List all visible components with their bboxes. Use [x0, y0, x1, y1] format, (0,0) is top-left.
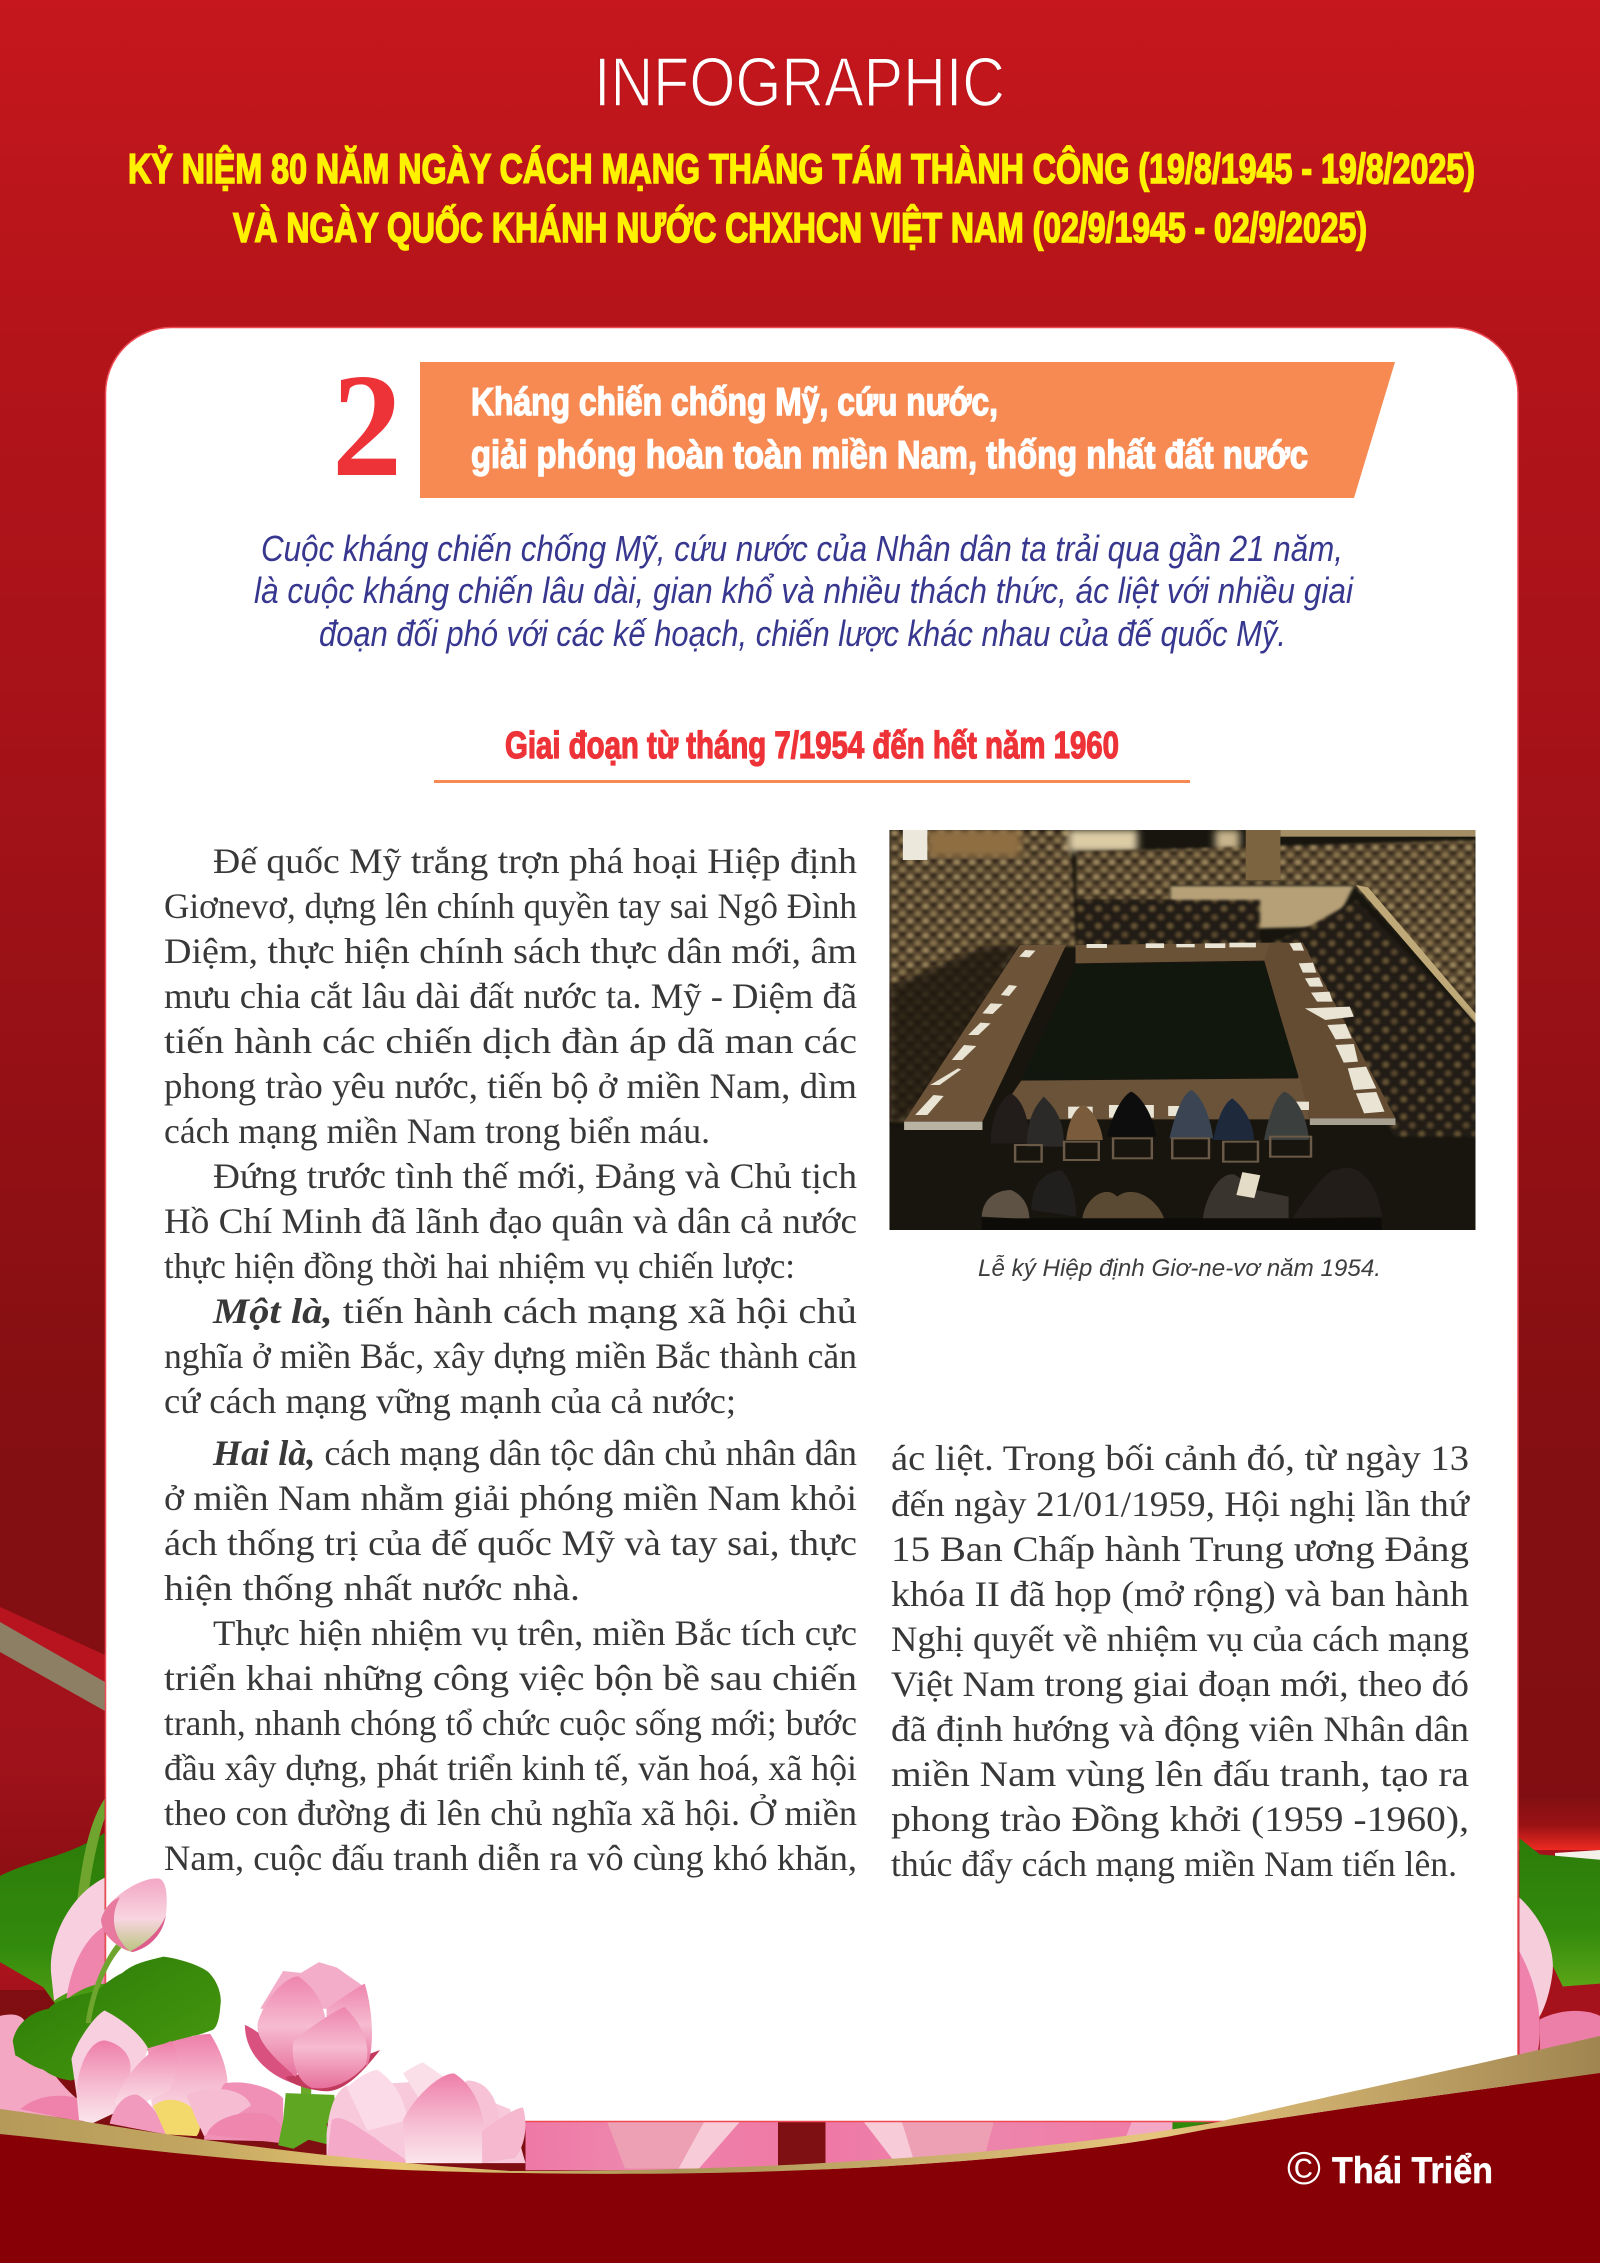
main title: INFOGRAPHIC: [594, 43, 1005, 121]
body text column 1: tranh, nhanh chóng tổ chức cuộc sống mới; bước: [164, 1703, 857, 1743]
body text column 1: Đứng trước tình thế mới, Đảng và Chủ tịch: [213, 1156, 857, 1196]
body text column 1: Hai là, cách mạng dân tộc dân chủ nhân dân: [212, 1433, 857, 1473]
body text column 1: ở miền Nam nhằm giải phóng miền Nam khỏi: [164, 1478, 857, 1518]
right glow background: [1518, 1795, 1600, 2060]
section heading banner: giải phóng hoàn toàn miền Nam, thống nhất đất nước: [471, 434, 1308, 477]
body text column 1: đầu xây dựng, phát triển kinh tế, văn hoá, xã hội: [164, 1748, 857, 1788]
body text column 1: cách mạng miền Nam trong biển máu.: [164, 1111, 710, 1151]
lotus behind the card: right: [1519, 1838, 1600, 2059]
body text column 1: theo con đường đi lên chủ nghĩa xã hội. Ở miền: [164, 1793, 857, 1833]
maroon footer: [0, 2073, 1600, 2263]
copyright credit: Thái Triển: [1332, 2150, 1493, 2191]
body text column 1: Hồ Chí Minh đã lãnh đạo quân và dân cả nước: [164, 1201, 857, 1241]
intro paragraph: là cuộc kháng chiến lâu dài, gian khổ và nhiều thách thức, ác liệt với nhiều giai: [254, 570, 1354, 611]
lotus strip under the card: [526, 2120, 1219, 2170]
period heading: Giai đoạn từ tháng 7/1954 đến hết năm 1960: [505, 725, 1119, 767]
icon: large open lotus: [20, 2011, 283, 2143]
icon: closed lotus flower: [245, 1962, 380, 2149]
copyright credit: ©: [1287, 2142, 1321, 2194]
body text column 1: Một là, tiến hành cách mạng xã hội chủ: [212, 1291, 857, 1331]
body text column 1: hiện thống nhất nước nhà.: [164, 1568, 580, 1608]
body text column 2: miền Nam vùng lên đấu tranh, tạo ra: [891, 1754, 1469, 1794]
gold ribbon: [0, 2036, 1600, 2174]
body text column 2: Nghị quyết về nhiệm vụ của cách mạng: [891, 1619, 1469, 1659]
body text column 1: ách thống trị của đế quốc Mỹ và tay sai, thực: [164, 1523, 857, 1563]
icon: outer lotus petal: [0, 2015, 77, 2120]
body text column 1: mưu chia cắt lâu dài đất nước ta. Mỹ - Diệm đã: [164, 976, 857, 1016]
body text column 1: thực hiện đồng thời hai nhiệm vụ chiến lược:: [164, 1246, 795, 1286]
photo: Geneva Accords signing: [889, 830, 1476, 1230]
icon: bud stem: [86, 1944, 121, 2023]
icon: lotus leaf: [13, 1957, 221, 2081]
intro paragraph: [254, 528, 1354, 654]
body text column 2: đã định hướng và động viên Nhân dân: [891, 1709, 1469, 1749]
body text column 2: ác liệt. Trong bối cảnh đó, từ ngày 13: [891, 1438, 1469, 1478]
body text column 2: 15 Ban Chấp hành Trung ương Đảng: [891, 1529, 1469, 1569]
body text column 1: tiến hành các chiến dịch đàn áp dã man các: [164, 1021, 857, 1061]
body text column 2: phong trào Đồng khởi (1959 -1960),: [891, 1799, 1469, 1839]
body text column 2: khóa II đã họp (mở rộng) và ban hành: [891, 1574, 1469, 1614]
section heading banner: [420, 362, 1395, 498]
body text column 2: đến ngày 21/01/1959, Hội nghị lần thứ: [891, 1484, 1471, 1524]
white content card: [106, 328, 1518, 2122]
section number: 2: [332, 344, 402, 508]
body text column 1: phong trào yêu nước, tiến bộ ở miền Nam, dìm: [164, 1066, 857, 1106]
body text column 1: Nam, cuộc đấu tranh diễn ra vô cùng khó khăn,: [164, 1838, 857, 1878]
left ribbon background: [0, 1607, 105, 1990]
body text column 1: [164, 841, 857, 1878]
body text column 1: nghĩa ở miền Bắc, xây dựng miền Bắc thành căn: [164, 1336, 857, 1376]
lotus behind the card: left: [0, 1799, 105, 2023]
copyright credit: [1287, 2142, 1493, 2194]
body text column 2: Việt Nam trong giai đoạn mới, theo đó: [891, 1664, 1469, 1704]
body text column 1: Diệm, thực hiện chính sách thực dân mới, âm: [164, 931, 857, 971]
body text column 1: Đế quốc Mỹ trắng trợn phá hoại Hiệp định: [213, 841, 857, 881]
subtitle: [128, 144, 1475, 251]
body text column 1: cứ cách mạng vững mạnh của cả nước;: [164, 1381, 736, 1421]
intro paragraph: Cuộc kháng chiến chống Mỹ, cứu nước của Nhân dân ta trải qua gần 21 năm,: [261, 528, 1343, 569]
body text column 2: thúc đẩy cách mạng miền Nam tiến lên.: [891, 1844, 1457, 1884]
body text column 2: [891, 1438, 1471, 1884]
intro paragraph: đoạn đối phó với các kế hoạch, chiến lược khác nhau của đế quốc Mỹ.: [319, 613, 1286, 654]
body text column 1: Thực hiện nhiệm vụ trên, miền Bắc tích cực: [213, 1613, 857, 1653]
lotus cluster over the card: [0, 1878, 526, 2163]
body text column 1: Giơnevơ, dựng lên chính quyền tay sai Ngô Đình: [164, 886, 857, 926]
body text column 1: triển khai những công việc bộn bề sau chiến: [164, 1658, 857, 1698]
icon: lower pale lotus: [327, 2063, 526, 2163]
section heading banner: Kháng chiến chống Mỹ, cứu nước,: [471, 381, 998, 424]
photo caption: Lễ ký Hiệp định Giơ-ne-vơ năm 1954.: [978, 1254, 1381, 1282]
icon: lotus bud: [101, 1878, 167, 1952]
